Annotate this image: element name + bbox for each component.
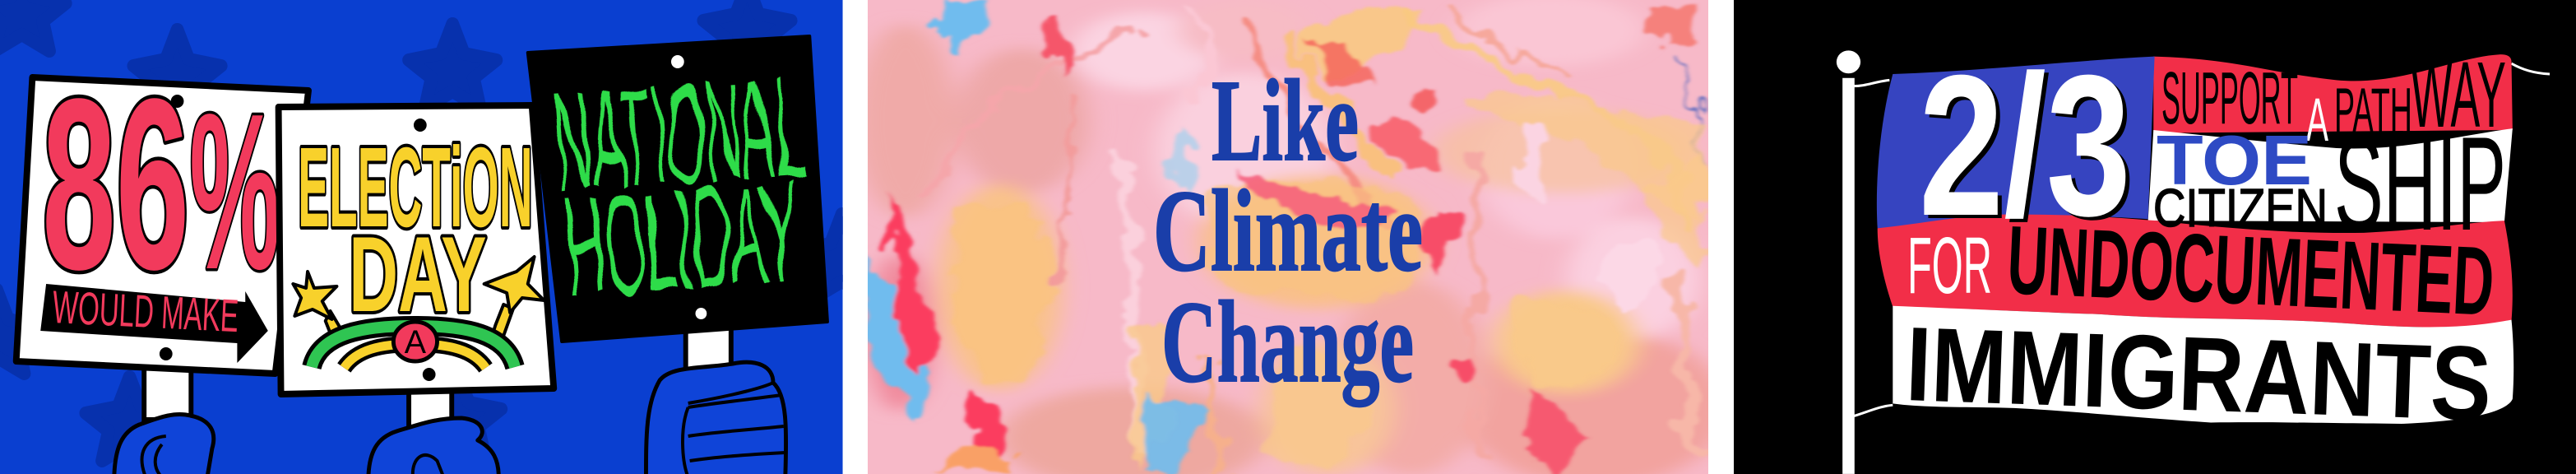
canton: [1877, 57, 2155, 228]
sign: election day: [279, 105, 554, 394]
sign post: right: [683, 331, 734, 367]
big number 86: 86: [42, 49, 189, 320]
number: two thirds: 2/3: [1919, 33, 2131, 258]
stripe: top red: [2153, 54, 2513, 133]
background stars: [0, 0, 886, 461]
panel: citizenship flag: PATH: [2334, 76, 2412, 146]
text: NATIONAL: [550, 48, 808, 222]
flowing streaks: [928, 6, 1706, 472]
hand: left: [114, 414, 214, 474]
text: immigrants: IMMIGRANTS: [1904, 305, 2494, 444]
paint blooms: [868, 0, 1709, 474]
text: a: A: [2306, 86, 2328, 154]
word: change: Change: [1161, 276, 1414, 407]
panel: election day signs: [0, 0, 886, 474]
icon: left star: [293, 272, 340, 342]
sign holes: [671, 55, 707, 319]
anarchy badge: [393, 322, 438, 361]
heading: day: DAY: [349, 215, 487, 334]
icon: right star: [484, 257, 544, 346]
arrow: would make: [40, 284, 268, 363]
arrow label: WOULD MAKE: [51, 281, 240, 342]
panel: citizenship flag: [1734, 0, 2576, 474]
sign: 86 percent: %: [189, 67, 280, 315]
flag: [1877, 54, 2513, 424]
anarchy badge: A: [405, 324, 427, 360]
sign holes: [414, 118, 436, 381]
text: citizen: CITIZEN: [2153, 178, 2328, 238]
hand: middle: [368, 418, 498, 474]
sign post: middle: [409, 388, 452, 428]
sign post: left: [144, 362, 191, 420]
word: climate: Climate: [1153, 165, 1423, 295]
title text: [1153, 55, 1423, 407]
sign holes: [160, 95, 183, 360]
panel: election day signs: HOLIDAY: [560, 153, 804, 327]
flag pole: [1837, 50, 2550, 474]
panel: citizenship flag: SUPPORT: [2161, 58, 2298, 140]
sign: national holiday: [528, 36, 827, 342]
rainbow: [312, 326, 515, 368]
hand: right: [646, 362, 786, 474]
stripe: bottom white: [1893, 306, 2513, 424]
text: for: FOR: [1907, 221, 1992, 310]
stripe: middle red: [1878, 214, 2513, 328]
stripe: white: [2148, 128, 2513, 222]
word: like: Like: [1212, 55, 1359, 185]
text: to: TOE: [2157, 122, 2312, 200]
sign: 86 percent: [16, 49, 308, 374]
panel: election day signs: ELECTiON: [298, 124, 533, 251]
marbled paint background: [855, 0, 1728, 474]
panel: like climate change: [855, 0, 1728, 474]
